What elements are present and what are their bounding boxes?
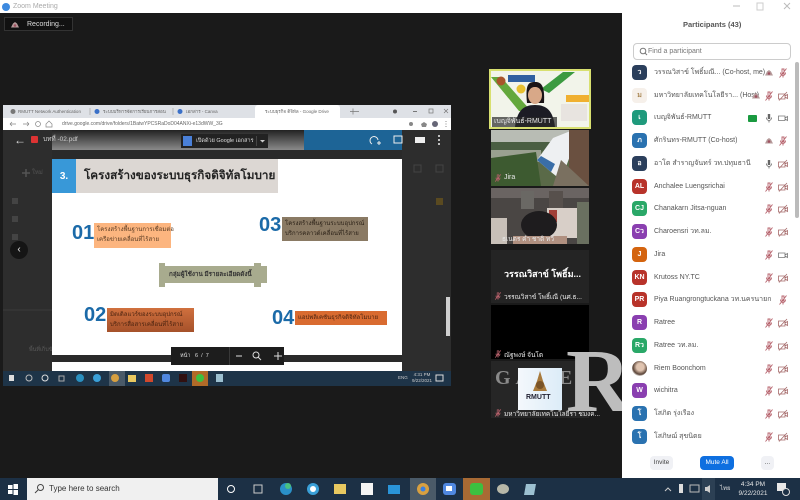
clock: 4:34 PM <box>741 481 765 488</box>
recording label: Recording... <box>27 21 65 28</box>
number 04: 04 <box>272 307 294 329</box>
row 12 <box>622 312 800 334</box>
label 01: โครงสร้างพื้นฐานการเชื่อมต่อ <box>97 227 174 233</box>
file name: บทที่ -02.pdf <box>43 136 78 143</box>
row 15 <box>622 380 800 402</box>
row 7: Chanakarn Jitsa-nguan <box>654 205 726 212</box>
number 03: 03 <box>259 214 281 236</box>
label 02 <box>107 308 194 332</box>
blue slide strip <box>304 130 402 150</box>
drive right side dimmed <box>402 130 451 371</box>
heading number: 3. <box>60 171 68 182</box>
heading text: โครงสร้างของระบบธุรกิจดิจิทัลโมบาย <box>84 169 275 182</box>
row 9 <box>632 247 788 262</box>
clock: 9/22/2021 <box>739 490 767 497</box>
name: ธเนตร คำ ชาติ ทวี <box>502 236 554 243</box>
mute all button <box>700 456 734 470</box>
presenter scene <box>491 71 589 127</box>
muted icon <box>495 174 501 182</box>
row 12: Ratree <box>654 319 675 326</box>
row 15: wichitra <box>654 387 678 394</box>
browser tab strip <box>3 105 451 118</box>
tab 3: เอกสาร - Canva <box>186 109 218 114</box>
muted icon <box>495 350 501 358</box>
row 10 <box>632 270 788 285</box>
main taskbar <box>0 478 800 500</box>
window title: Zoom Meeting <box>13 3 58 10</box>
caption: วรรณวิสาข์ โพธิ์เณี (นศ.ธ... <box>504 294 582 301</box>
system tray <box>660 478 735 500</box>
search icon <box>640 48 648 56</box>
tray language: ไทย <box>720 486 730 492</box>
row 8: Charoensri วท.ลม. <box>654 228 712 235</box>
inner clock: 9/22/2021 <box>412 378 432 383</box>
row 1: วรรณวิสาข์ โพธิ์มณี... (Co-host, me) <box>654 69 765 76</box>
row 14 <box>622 358 800 380</box>
label 02: มิดเดิลแวร์ของระบบอุปกรณ์ <box>110 312 182 318</box>
row 11 <box>622 289 800 311</box>
muted icon <box>495 292 501 300</box>
row 10: KN <box>634 274 645 281</box>
outdoor scene <box>491 130 589 186</box>
participant rows <box>632 65 788 444</box>
row 13 <box>622 335 800 357</box>
row 7 <box>632 201 788 216</box>
row 9: J <box>638 251 641 258</box>
sidebar icons <box>3 169 52 310</box>
active tab: ระบบธุรกิจ ดิจิทัล - Google Drive <box>265 109 329 114</box>
row 3: เ <box>638 114 641 121</box>
inner tray language: ENG <box>398 375 408 380</box>
dimmed right icons <box>414 164 444 205</box>
icon: docs <box>183 136 192 146</box>
row 4: ภ <box>637 137 642 144</box>
search icon <box>34 483 45 494</box>
row 14: Riem Boonchom <box>654 365 706 372</box>
search text: Type here to search <box>49 484 120 493</box>
window buttons <box>350 108 448 114</box>
row 5 <box>632 156 788 171</box>
app icons <box>222 478 552 500</box>
RMUTT logo <box>518 368 562 410</box>
row 16 <box>622 403 800 425</box>
next page strip <box>52 362 402 371</box>
presenter name: เบญจิพันธ์-RMUTT <box>494 118 551 125</box>
video: black tile <box>491 305 589 359</box>
item 01 <box>72 222 174 248</box>
open with docs button <box>181 134 268 148</box>
tab 1: RMUTT Network Authentication <box>18 109 81 114</box>
logo text: RMUTT <box>526 394 550 401</box>
row 1 <box>632 65 787 80</box>
inner clock <box>412 372 432 383</box>
recording badge <box>4 17 73 31</box>
row 11: PR <box>635 296 644 303</box>
row 1: ว <box>638 69 641 76</box>
label 04 <box>295 311 387 325</box>
video: Jira <box>491 130 589 186</box>
viewer header <box>14 133 440 148</box>
tab favicons <box>10 108 182 115</box>
number 02: 02 <box>84 304 106 326</box>
previous button: ‹ <box>17 244 21 255</box>
caption: ณัฐพงษ์ จันโต <box>504 352 543 359</box>
number 01: 01 <box>72 222 94 244</box>
row 8: Cว <box>635 228 644 235</box>
row 3 <box>632 110 788 125</box>
video thumbnails <box>489 69 600 418</box>
item 03 <box>259 214 368 241</box>
muted icon <box>495 409 501 417</box>
row 17 <box>622 426 800 448</box>
tile name: วรรณวิสาข์ โพธิ์ม... <box>504 269 581 279</box>
video: presenter <box>489 69 591 129</box>
inner taskbar <box>3 371 451 386</box>
drive sidebar dimmed <box>3 130 52 371</box>
panel title: Participants (43) <box>683 20 741 29</box>
row 13: Rว <box>635 342 644 349</box>
toolbar icons <box>409 121 446 127</box>
row 7: CJ <box>635 205 644 212</box>
pdf top strip <box>52 130 402 150</box>
page controls <box>171 347 284 365</box>
row 6: Anchalee Luengsrichai <box>654 183 725 190</box>
row 5: อ <box>637 160 642 167</box>
shared browser window <box>3 105 451 386</box>
previous button <box>10 241 28 259</box>
icon: pdf <box>31 136 38 143</box>
row 2: มหาวิทยาลัยเทคโนโลยีรา... (Host) <box>654 92 759 99</box>
room scene <box>491 188 589 244</box>
row 4 <box>632 133 787 148</box>
mute all button: Mute All <box>705 459 729 466</box>
caption: มหาวิทยาลัยเทคโนโลยีรา ชมงค... <box>504 411 600 418</box>
button label: เปิดด้วย Google เอกสาร <box>196 138 254 144</box>
row 9: Jira <box>654 251 665 258</box>
row 6 <box>632 179 788 194</box>
label 01: เครือข่ายเคลื่อนที่ไร้สาย <box>97 237 159 243</box>
row 16: โ <box>638 410 641 417</box>
nav icons <box>10 120 52 128</box>
invite button: Invite <box>654 459 669 466</box>
more button: ... <box>765 459 770 466</box>
centre banner <box>159 263 267 287</box>
notification icon <box>776 482 792 497</box>
inner clock: 4:31 PM <box>414 372 430 377</box>
row 15: W <box>636 387 643 394</box>
label 03: บริการคลาวด์เคลื่อนที่ไร้สาย <box>285 231 359 237</box>
url: drive.google.com/drive/folders/1BatwYPCSRaDoD04ANXi-e13dWW_3G <box>62 121 223 127</box>
icon: recording <box>11 22 19 28</box>
item 04 <box>272 307 387 329</box>
more button <box>761 456 774 470</box>
left cap <box>159 263 165 287</box>
label 04: แอปพลิเคชันธุรกิจดิจิทัลโมบาย <box>298 315 378 321</box>
icon: zoom logo <box>2 3 10 11</box>
invite button <box>650 456 673 470</box>
row 2 <box>632 88 788 103</box>
banner text: กลุ่มผู้ใช้งาน มีรายละเอียดดังนี้ <box>169 271 252 278</box>
watermark text: GAME <box>495 367 577 389</box>
row 11: Piya Ruangrongtuckana วท.นครนายก <box>654 296 771 303</box>
row 13: Ratree วท.ลม. <box>654 342 698 349</box>
logo emblem <box>533 371 547 391</box>
tab 2: ระบบบริหารจัดการเรียนการสอน <box>103 109 166 114</box>
window controls <box>733 2 790 10</box>
row 6: AL <box>635 183 644 190</box>
right cap <box>254 263 261 287</box>
slide heading <box>52 159 278 193</box>
scrollbar thumb <box>446 297 450 336</box>
sidebar storage: พื้นที่เก็บข้อมูล <box>29 347 63 353</box>
inner taskbar icons <box>9 371 444 386</box>
row 5: อาโต สำราญจันทร์ วท.ปทุมธานี <box>654 160 751 167</box>
label 03 <box>282 217 368 241</box>
sidebar labels: ใหม่ <box>32 170 43 176</box>
video: name tile <box>491 250 589 303</box>
label 01 <box>94 223 171 248</box>
heading number <box>52 159 76 193</box>
row 17: โ <box>638 433 641 440</box>
row 16: โสภิต รุ่งเรือง <box>654 410 694 417</box>
title bar <box>0 0 622 13</box>
name: Jira <box>504 174 515 181</box>
participants panel <box>622 0 800 478</box>
search placeholder: Find a participant <box>648 48 702 55</box>
zoom controls <box>229 347 282 365</box>
item 02 <box>84 304 194 332</box>
active tab <box>255 105 340 118</box>
row 12: R <box>637 319 642 326</box>
video: RMUTT logo tile <box>491 361 589 418</box>
search box <box>633 43 791 60</box>
row 10: Krutoss NY.TC <box>654 274 700 281</box>
scrollbar <box>795 62 799 218</box>
row 8 <box>632 224 788 239</box>
banner bar <box>159 266 267 283</box>
address bar <box>3 118 451 130</box>
row 2: ม <box>637 92 642 99</box>
viewer tool icons <box>370 135 440 145</box>
page number: หน้า 6 / 7 <box>180 353 209 359</box>
slide page <box>52 159 402 355</box>
search box <box>27 478 218 500</box>
icon: windows start <box>8 484 19 495</box>
row 3: เบญจิพันธ์-RMUTT <box>654 114 711 121</box>
row 4: ศักรินทร-RMUTT (Co-host) <box>654 137 737 144</box>
row 17: โสภิษฌ์ สุขนิตย <box>654 433 702 440</box>
label 02: บริการสื่อสารเคลื่อนที่ไร้สาย <box>110 322 183 328</box>
dropdown <box>256 136 265 146</box>
clock <box>735 480 771 498</box>
label 03: โครงสร้างพื้นฐานระบบอุปกรณ์ <box>285 221 364 227</box>
back arrow: ← <box>14 133 26 147</box>
video: third participant <box>491 188 589 244</box>
